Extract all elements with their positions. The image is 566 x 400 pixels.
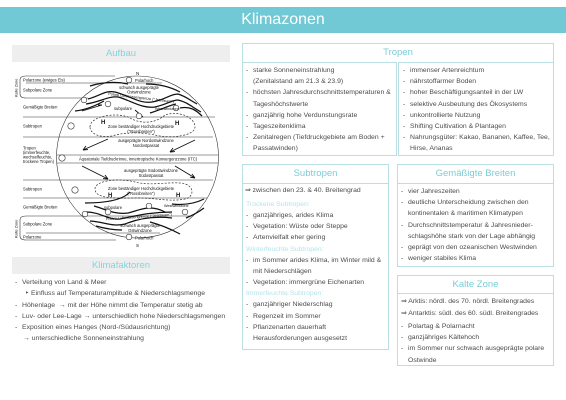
text block: Gemäßigte Breiten list: Durchschnittstemperatur & Jahresnieder- [408,222,533,229]
text block: Gemäßigte Breiten list [401,188,537,262]
panel: Subtropen: - [246,257,248,264]
zone labels: Nordostpassat [133,143,160,148]
zone labels: schwach ausgeprägte [120,223,161,228]
title banner: Klimazonen [241,11,325,28]
text block: Subtropen list: Regenzeit im Sommer [253,313,321,320]
text block: Tropen climate [246,67,391,152]
panel: Tropen left column: - [246,112,248,119]
panel: Tropen left column: - [246,89,248,96]
text block: Gemäßigte Breiten list: weniger stabiles Klima [408,255,476,262]
panel: Subtropen [242,164,389,350]
text block: Gemäßigte Breiten list: deutliche Unterscheidung zwischen den [408,199,529,206]
zone labels: Polare Luftmassengrenze ("Jetstream") [106,213,173,221]
zone labels: Westwindzone [155,107,180,111]
text block: Tropen climate: ganzjährig hohe Verdunstungsrate [253,112,357,119]
text block: Tropen climate: Tageshöchstwerte [253,101,308,108]
text block: Kalte Zone location: ⇒ Arktis: nördl. des 70. nördl. Breitengrades [401,298,534,305]
text: - [15,302,17,309]
heading: Kalte Zone [398,276,553,294]
panel: Tropen right column: - [403,67,405,74]
text block: Tropen ecosystem: selektive Ausbeutung des Ökosystems [410,101,527,108]
zone labels: wechselfeuchte, [23,154,52,160]
zone labels: Gemäßigte Breiten [23,104,58,110]
panel: Kalte Zone: - [401,345,403,352]
zone labels: Tropen [23,146,37,150]
zone labels: subpolare [104,205,123,210]
text block: Klimafaktoren list [15,279,225,342]
text block: Subtropen list [246,201,382,342]
zone labels: H [175,121,179,127]
zone labels: S [136,243,139,248]
zone labels: Zone beständiger Hochdruckgebiete [108,124,175,129]
text block: Subtropen list: Immerfeuchte Subtropen: [246,290,323,297]
text block: Subtropen list: Trockene Subtropen: [246,201,310,208]
zone labels: Subpolare Zone [23,88,53,92]
panel: Gemäßigte Breiten [397,164,554,267]
text block: Klimafaktoren list: Verteilung von Land & Meer [22,279,106,286]
text block: Tropen ecosystem [403,67,550,152]
text block: Gemäßigte Breiten list: schlagshöhe stark von der Lage abhängig [408,233,535,240]
text block: Tropen ecosystem: Nahrungsgüter: Kakao, Bananen, Kaffee, Tee, [410,134,550,141]
text block: Subtropen list: Vegetation: Wüste oder Steppe [253,223,348,230]
text block: Klimafaktoren list: ‣ Einfluss auf Temperaturamplitude & Niederschlagsmenge [25,290,205,297]
heading: Klimafaktoren [12,257,230,274]
text block: Tropen ecosystem: immenser Artenreichtum [410,67,484,74]
heading: Subtropen: Subtropen [294,168,337,179]
zone labels [14,71,198,248]
zone labels: Polarhoch [135,236,154,240]
heading: Kalte Zone: Kalte Zone [453,279,498,290]
zone labels: Ostwindzone [127,90,152,94]
text block: Kalte Zone list: im Sommer nur schwach ausgeprägte polare [408,345,544,352]
zone labels: Polarhoch [135,78,154,83]
zone labels: Ostwindzone [128,228,153,233]
heading: Gemäßigte Breiten: Gemäßigte Breiten [436,168,515,179]
dashed high-pressure zones [90,113,195,200]
text: - [15,324,17,331]
heading: Tropen: Tropen [383,47,413,58]
text block: Kalte Zone list: ganzjähriges Kältehoch [408,334,479,341]
text block: Subtropen list: Vegetation: immergrüne Eichenarten [253,279,364,286]
heading: Gemäßigte Breiten [398,165,553,184]
panel: Tropen left column: - [246,134,248,141]
panel: Subtropen: - [246,223,248,230]
zone labels: Polarzone (ewiges Eis) [23,78,66,82]
panel: Subtropen: - [246,313,248,320]
zone labels: subpolare [114,106,133,111]
zone labels: Zone beständiger Hochdruckgebiete [108,186,175,191]
text block: Subtropen list: Artenvielfalt eher gering [253,234,325,241]
heading: Aufbau: Aufbau [106,48,136,59]
text block: Subtropen list: Pflanzenarten dauerhaft [253,324,326,331]
diagram: climate zones of the globe [14,71,219,248]
text block: Klimafaktoren list: Exposition eines Hanges (Nord-/Südausrichtung) [22,324,170,331]
text block: Klimafaktoren list: → unterschiedliche Sonneneinstrahlung [23,335,144,342]
jet streams [75,82,204,234]
zone labels: Polare Luftmassengrenze ("Jetstream") [108,92,175,104]
panel: Tropen left column: - [246,67,248,74]
panel: Gemäßigte Breiten: - [401,188,403,195]
text block: Gemäßigte Breiten list: kontinentalen & maritimen Klimatypen [408,210,523,217]
text block: Kalte Zone location [401,298,538,317]
text block: Subtropen list: ganzjähriger Niederschlag [253,301,333,308]
zone labels: (immerfeuchte, [23,150,50,155]
zone labels: trockene Tropen) [23,159,55,164]
text block: Subtropen location: ⇒ zwischen den 23. & 40. Breitengrad [245,187,361,194]
panel: Tropen right column: - [403,134,405,141]
text block: Gemäßigte Breiten list: geprägt von den ozeanischen Westwinden [408,244,537,251]
title banner [0,7,566,33]
zone labels: N [136,71,139,76]
text block: Tropen climate: höchsten Jahresdurchschnittstemperaturen & [253,89,391,96]
panel: Tropen right column: - [403,78,405,85]
text block: Kalte Zone list [401,323,544,364]
text block: Tropen climate: starke Sonneneinstrahlung [253,67,334,74]
zone labels: ("Rossbreiten") [127,129,155,134]
text block: Subtropen list: Herausforderungen ausgesetzt [253,335,347,342]
text block: Tropen climate: Tageszeitenklima [253,123,306,130]
text block: Subtropen list: mit Niederschlägen [253,268,312,275]
text block: Tropen ecosystem: Shifting Cultivation & Plantagen [410,123,506,130]
panel: Tropen right column [398,62,554,156]
panel: Subtropen: - [246,234,248,241]
text block: Tropen climate: (Zenitalstand am 21.3 & 23.9) [253,78,343,85]
text block: Gemäßigte Breiten list: vier Jahreszeiten [408,188,460,195]
zone labels: Subtropen [23,186,43,192]
text block: Tropen climate: Passatwinden) [253,145,298,152]
zone labels: ausgeprägte Südostwindzone [124,168,179,173]
panel: Subtropen: - [246,279,248,286]
wind arrows [82,105,195,179]
panel: Tropen left column [242,62,397,156]
panel: Kalte Zone: - [401,323,403,330]
panel: Subtropen: - [246,212,248,219]
heading: Aufbau [12,45,230,62]
panel: Gemäßigte Breiten: - [401,222,403,229]
panel: Gemäßigte Breiten: - [401,255,403,262]
panel: Kalte Zone [397,275,554,366]
zone labels: Kalte Zone [14,220,18,238]
text block: Tropen ecosystem: Hirse, Ananas [410,145,453,152]
zone labels: H [108,193,112,199]
panel: Tropen left column: - [246,123,248,130]
zone labels: Subtropen [23,124,43,128]
text block: Tropen climate: Zenitalregen (Tiefdruckgebiete am Boden + [253,134,385,141]
panel: Tropen right column: - [403,123,405,130]
panel: Gemäßigte Breiten: - [401,244,403,251]
panel: Tropen right column: - [403,89,405,96]
heading: Klimafaktoren: Klimafaktoren [92,260,150,271]
circled zone numbers [59,77,188,240]
zone labels: Südostpassat [139,173,164,178]
zone labels: schwach ausgeprägte [119,85,160,90]
zone labels: Gemäßigte Breiten [23,204,58,210]
panel: Gemäßigte Breiten: - [401,199,403,206]
panel: Subtropen: - [246,324,248,331]
zone labels: Subpolare Zone [23,222,53,226]
text block: Subtropen list: Winterfeuchte Subtropen: [246,246,324,253]
heading: Subtropen [243,165,388,184]
text block: Kalte Zone list: Ostwinde [408,357,437,364]
text block: Tropen ecosystem: hoher Beschäftigungsanteil in der LW [410,89,523,96]
text block: Subtropen list: ganzjähriges, arides Klima [253,212,333,219]
panel: Kalte Zone: - [401,334,403,341]
text block: Kalte Zone location: ⇒ Antarktis: südl. des 60. südl. Breitengrades [401,310,538,317]
text: - [15,313,17,320]
text block: Tropen ecosystem: nährstoffarmer Boden [410,78,476,85]
zone labels: Äquatoriale Tiefdruckrinne, Innertropische Konvergenzzone (ITC) [79,156,198,162]
text: - [15,279,17,286]
zone labels: Kalte Zone [14,79,18,97]
zone labels: Polarzone [23,234,42,240]
panel: Tropen [242,43,554,63]
panel: Tropen right column: - [403,101,405,108]
text block: Klimafaktoren list: Höhenlage → mit der Höhe nimmt die Temperatur stetig ab [22,302,203,309]
zone labels: ausgeprägte Nordostwindzone [118,138,174,143]
panel: Tropen right column: - [403,112,405,119]
text block: Kalte Zone list: Polartag & Polarnacht [408,323,475,330]
panel: Subtropen: - [246,301,248,308]
zone labels: ("Rossbreiten") [127,191,155,196]
text block: Tropen ecosystem: unkontrollierte Nutzung [410,112,480,119]
zone labels: Westwindzone [164,204,189,208]
text block: Subtropen list: im Sommer arides Klima, im Winter mild & [253,257,381,264]
zone labels: H [101,120,105,126]
zone labels: H [176,193,180,199]
text block: Klimafaktoren list: Luv- oder Lee-Lage → unterschiedlich hohe Niederschlagsmengen [22,313,225,320]
